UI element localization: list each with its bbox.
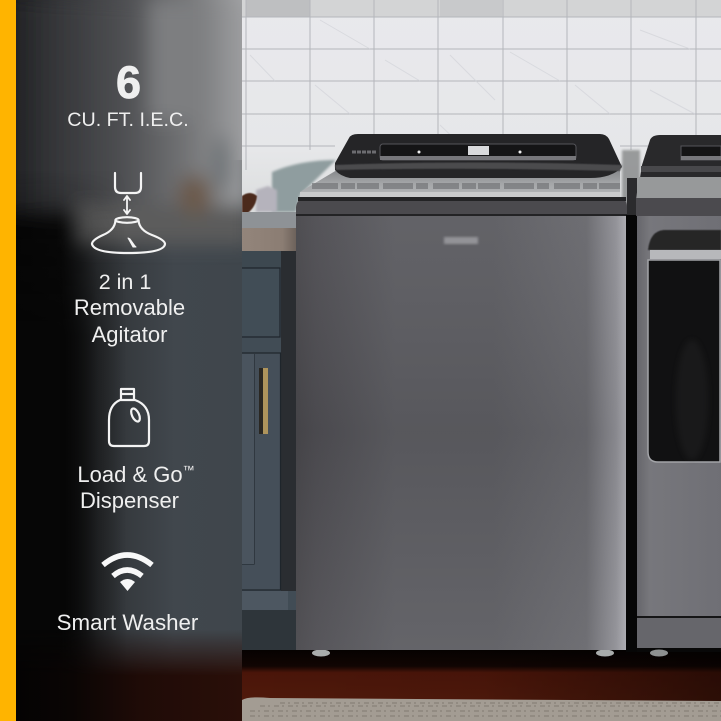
label: load and go dispenser: ™ — [183, 463, 195, 477]
label: 2 in 1 removable agitator — [74, 270, 185, 347]
dryer door — [648, 230, 721, 250]
companion dryer — [626, 135, 721, 656]
wood floor — [242, 650, 721, 704]
counter objects — [242, 186, 277, 216]
washer feet — [312, 650, 614, 656]
panel dark left column — [35, 197, 116, 658]
panel floor tone — [76, 636, 242, 721]
left feature panel — [0, 0, 250, 721]
photo background: laundry room — [241, 0, 721, 721]
washer body — [296, 215, 626, 650]
countertop — [242, 212, 296, 251]
capacity stat: 6 cu ft: CU. FT. I.E.C. — [67, 109, 189, 131]
label: load and go dispenser: Dispenser — [80, 488, 179, 513]
dryer foot — [650, 650, 668, 656]
label: load and go dispenser: Load & Go — [77, 462, 183, 487]
door — [241, 353, 280, 590]
panel upper tone — [16, 0, 242, 160]
wall shadow beside washer — [272, 160, 336, 212]
base — [242, 591, 288, 610]
icon: detergent bottle — [109, 389, 149, 446]
rug — [242, 697, 721, 721]
main washer — [296, 134, 627, 656]
yellow side stripe — [0, 0, 16, 721]
label: 2 in 1 removable agitator: Agitator — [92, 322, 167, 347]
display — [468, 146, 489, 155]
panel base gradient — [16, 211, 242, 667]
lid with reflection — [300, 170, 620, 197]
drawer — [241, 268, 280, 337]
icon: wifi — [103, 555, 152, 591]
badge — [444, 237, 478, 244]
icon: agitator — [92, 173, 165, 253]
capacity stat: 6 cu ft — [67, 57, 189, 131]
label: 2 in 1 removable agitator: Removable — [74, 295, 185, 320]
blue-grey cabinet — [241, 251, 296, 651]
top band — [296, 199, 627, 215]
dryer console — [640, 135, 721, 178]
cabinet handle — [259, 368, 264, 434]
label: smart washer: Smart Washer — [57, 610, 199, 635]
label: 2 in 1 removable agitator: 2 in 1 — [99, 270, 151, 294]
control console — [335, 134, 622, 178]
label: load and go dispenser — [77, 462, 195, 513]
capacity stat: 6 cu ft: 6 — [116, 57, 141, 108]
tile wall — [242, 0, 721, 215]
panel blurred scenery — [0, 0, 250, 245]
